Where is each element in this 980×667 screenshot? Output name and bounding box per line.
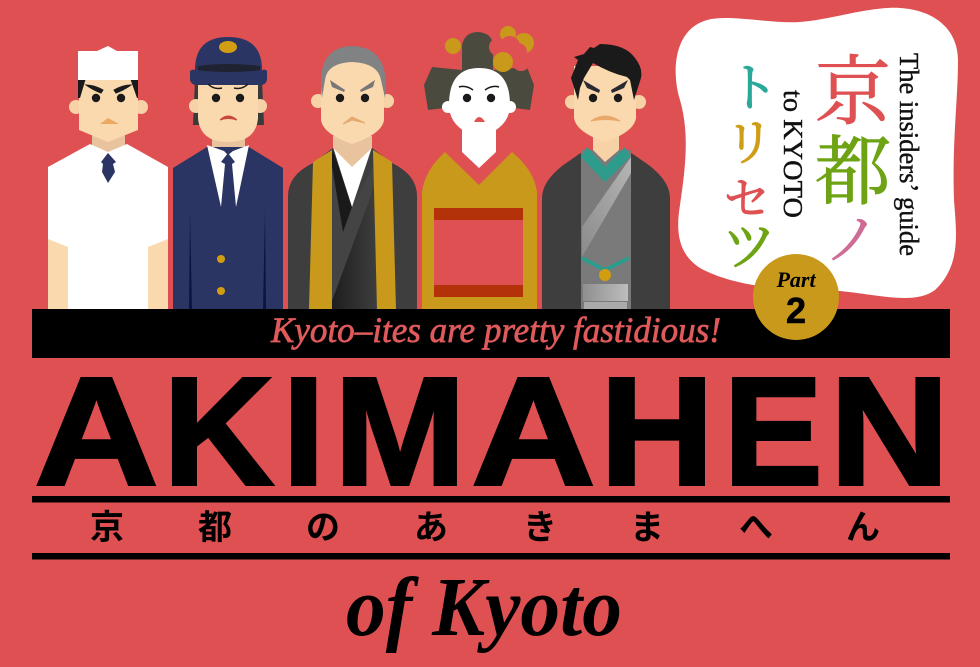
kimono man hair	[571, 44, 641, 100]
geisha hair	[424, 32, 534, 110]
black tagline bar	[32, 309, 950, 358]
main title: AKIMAHEN: A	[34, 345, 158, 518]
hakama sash	[583, 284, 628, 309]
monk stole	[309, 150, 396, 309]
main title: AKIMAHEN: K	[163, 345, 274, 518]
vertical title: se katakana: セ	[724, 174, 770, 225]
main title: AKIMAHEN: A	[471, 345, 595, 518]
figure: train conductor	[173, 37, 283, 309]
top rule	[32, 496, 950, 502]
chef tie	[101, 153, 116, 183]
conductor cap	[190, 37, 267, 85]
vertical title: ri katakana: リ	[724, 115, 774, 171]
subtitle: of Kyoto: of Kyoto	[346, 561, 622, 654]
vertical title: to: 都	[815, 131, 891, 215]
figure: sushi chef	[48, 46, 168, 309]
badge: part 2: 2	[786, 290, 806, 331]
main title: AKIMAHEN	[34, 345, 950, 518]
tagline: Kyoto–ites are pretty fastidious!	[270, 310, 721, 350]
panel: title blob	[676, 8, 958, 298]
figure: monk	[288, 46, 417, 309]
main title: AKIMAHEN: M	[334, 346, 466, 518]
figure: geisha	[422, 26, 537, 309]
badge: part 2: Part	[775, 267, 816, 292]
obi	[434, 208, 523, 297]
badge: part 2	[753, 254, 839, 340]
vertical title: Kyo: 京	[815, 51, 891, 135]
vertical title: to katakana: ト	[727, 61, 779, 118]
main title: AKIMAHEN: E	[724, 346, 823, 518]
subtitle: the insiders' guide: The insiders’ guide	[894, 53, 924, 256]
chef hat	[78, 46, 138, 80]
main title: AKIMAHEN: N	[829, 345, 950, 517]
main title: AKIMAHEN: H	[600, 346, 714, 518]
japanese subtitle: 京都のあきまへん	[90, 509, 880, 547]
figure: man in kimono	[542, 44, 670, 309]
vertical title: tsu katakana: ツ	[722, 217, 776, 277]
main title: AKIMAHEN: I	[282, 346, 325, 518]
bottom rule	[32, 553, 950, 560]
vertical title: no: ノ	[824, 210, 880, 272]
hair ornaments	[445, 26, 534, 72]
subtitle: to Kyoto: to KYOTO	[778, 90, 808, 218]
